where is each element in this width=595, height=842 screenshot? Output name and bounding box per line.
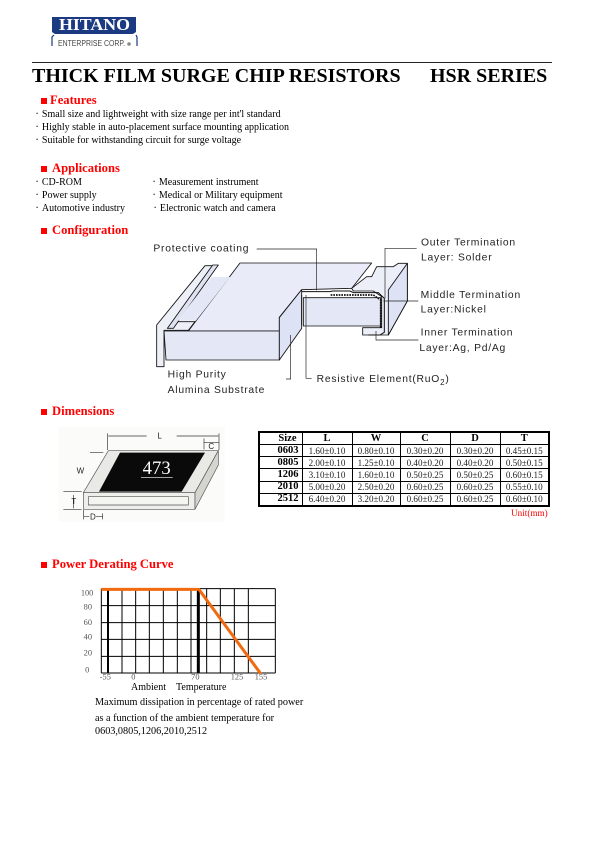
axis labels: 155	[255, 673, 267, 682]
marking 473: 473	[143, 458, 171, 479]
black resistor body	[99, 453, 205, 492]
heading: Dimensions: Dimensions	[52, 404, 114, 418]
applications right list	[152, 176, 282, 214]
dimensions table: 0.60±0.10	[506, 494, 543, 504]
chart: power derating curve	[81, 588, 276, 682]
dimensions table: 1.60±0.10	[358, 470, 394, 480]
axis labels: 60	[84, 618, 92, 627]
dimensions table: 0.80±0.10	[358, 446, 394, 456]
axis labels: 70	[191, 673, 199, 682]
features list: Highly stable in auto-placement surface mounting application	[42, 122, 289, 133]
title: THICK FILM SURGE CHIP RESISTORS	[32, 65, 401, 87]
dimensions table: 3.10±0.10	[309, 470, 345, 480]
x axis title	[131, 682, 226, 693]
diagram: chip dimensions: W	[77, 466, 85, 475]
dimensions table: 0.30±0.20	[407, 446, 443, 456]
diagram labels: High Purity	[168, 370, 227, 381]
applications left list: Automotive industry	[42, 202, 125, 214]
diagram labels: Alumina Substrate	[168, 385, 265, 396]
dimensions table: Size	[278, 433, 296, 444]
heading: Features: Features	[50, 93, 97, 107]
diagram labels: Resistive Element(RuO	[317, 374, 440, 385]
dimensions table: 0.60±0.25	[407, 494, 443, 504]
features list: Small size and lightweight with size range per int'l standard	[42, 109, 281, 120]
applications right list: ‧	[152, 176, 156, 188]
dimensions table: 0.60±0.15	[506, 470, 543, 480]
applications right list: ‧	[154, 202, 157, 214]
dimension marks	[63, 433, 219, 519]
right section front face	[303, 298, 381, 326]
diagram labels: Layer:Ag, Pd/Ag	[419, 343, 506, 354]
dimensions table: 5.00±0.20	[309, 482, 345, 492]
x axis title: Temperature	[176, 682, 226, 693]
diagram: chip dimensions: C	[208, 442, 214, 451]
termination layers	[302, 291, 384, 335]
diagram labels: Layer: Solder	[421, 253, 492, 264]
diagram labels: Outer Termination	[421, 238, 516, 249]
chart caption: as a function of the ambient temperature for	[95, 713, 274, 724]
dimensions table: 0805	[278, 457, 298, 468]
axis labels: 40	[84, 633, 92, 642]
diagram labels	[153, 238, 521, 396]
axis labels: 80	[84, 602, 92, 611]
diagram labels: )	[445, 374, 450, 385]
dimensions table: 0.60±0.25	[457, 494, 493, 504]
diagram: chip dimensions: L	[157, 432, 162, 441]
diagram labels: Layer:Nickel	[421, 305, 487, 316]
logo: Hitano	[51, 16, 138, 48]
dimensions table: D	[471, 433, 479, 444]
dimensions table: 0.60±0.25	[407, 482, 443, 492]
features list: ‧	[36, 135, 39, 146]
features list	[36, 109, 289, 146]
dimensions table: 0.40±0.20	[407, 458, 443, 468]
dimensions table: 0.55±0.10	[506, 482, 543, 492]
dimensions table: 0.50±0.15	[506, 458, 543, 468]
axis labels: 20	[84, 648, 92, 657]
applications right list: Electronic watch and camera	[160, 202, 276, 214]
grid	[101, 589, 275, 673]
applications right list: Measurement instrument	[159, 176, 259, 188]
diagram labels: Protective coating	[153, 244, 249, 255]
dimensions table: 1206	[278, 469, 298, 480]
axis labels	[81, 588, 267, 682]
applications right list: Medical or Military equipment	[159, 190, 282, 200]
x axis title: Ambient	[131, 682, 166, 693]
dimensions table	[258, 431, 550, 507]
dimensions table: 2.00±0.10	[309, 458, 345, 468]
dimensions table: 2.50±0.20	[358, 482, 394, 492]
applications left list	[36, 176, 125, 214]
dimensions table: 0.45±0.15	[506, 446, 543, 456]
applications left list: ‧	[36, 202, 39, 214]
dimensions table: 0603	[278, 445, 298, 456]
applications left list: Power supply	[42, 190, 97, 200]
dimensions table: 2512	[278, 493, 298, 504]
chart caption: Maximum dissipation in percentage of rated power	[95, 697, 303, 708]
chart caption	[95, 697, 304, 737]
diagram: chip dimensions: T	[71, 497, 76, 506]
diagram labels: Inner Termination	[421, 327, 513, 338]
heading: Configuration: Configuration	[52, 223, 128, 237]
axis labels: 0	[131, 673, 135, 682]
dimensions table: C	[421, 433, 429, 444]
dimensions table: 0.60±0.25	[457, 482, 493, 492]
diagram labels: Middle Termination	[421, 290, 521, 301]
dimensions table: 0.50±0.25	[457, 470, 493, 480]
heading: Applications: Applications	[52, 161, 120, 175]
dimensions table: 1.25±0.10	[358, 458, 394, 468]
applications left list: CD-ROM	[42, 176, 82, 188]
diagram: chip dimensions	[63, 432, 220, 522]
substrate front face	[164, 290, 302, 360]
dimensions table: 6.40±0.20	[309, 494, 345, 504]
unit note: Unit(mm)	[511, 508, 548, 518]
diagram labels: 2	[440, 378, 445, 387]
right termination	[352, 263, 407, 335]
dimensions table: 0.40±0.20	[457, 458, 493, 468]
derating line	[101, 589, 261, 674]
header rule	[32, 62, 552, 63]
features list: Suitable for withstanding circuit for surge voltage	[42, 135, 241, 146]
axis labels: 125	[231, 673, 243, 682]
applications right list: ‧	[152, 190, 156, 200]
dimensions table: 2010	[278, 481, 298, 492]
thick limit lines	[108, 589, 198, 673]
title: HSR SERIES	[430, 65, 547, 87]
dimensions table: 1.60±0.10	[309, 446, 345, 456]
axis labels: 0	[85, 665, 89, 674]
dimensions table: T	[521, 433, 528, 444]
dimensions table: 0.50±0.25	[407, 470, 443, 480]
protective coating surface	[188, 263, 372, 331]
axis labels: 100	[81, 588, 93, 597]
axis labels: -55	[100, 673, 111, 682]
dimensions table: W	[371, 433, 381, 444]
dimensions table: 3.20±0.20	[358, 494, 394, 504]
chart caption: 0603,0805,1206,2010,2512	[95, 726, 207, 737]
applications left list: ‧	[36, 176, 39, 188]
leader lines	[257, 248, 418, 379]
applications left list: ‧	[36, 190, 39, 200]
logo: Hitano: ENTERPRISE CORP.	[58, 39, 125, 48]
diagram: chip dimensions: D	[90, 513, 96, 522]
dimensions table: 0.30±0.20	[457, 446, 493, 456]
features list: ‧	[36, 122, 39, 133]
diagram: chip resistor cross-section	[153, 238, 521, 396]
dimensions table: L	[323, 433, 330, 444]
left termination	[157, 265, 230, 367]
features list: ‧	[36, 109, 39, 120]
heading: Power Derating Curve: Power Derating Curve	[52, 557, 173, 571]
